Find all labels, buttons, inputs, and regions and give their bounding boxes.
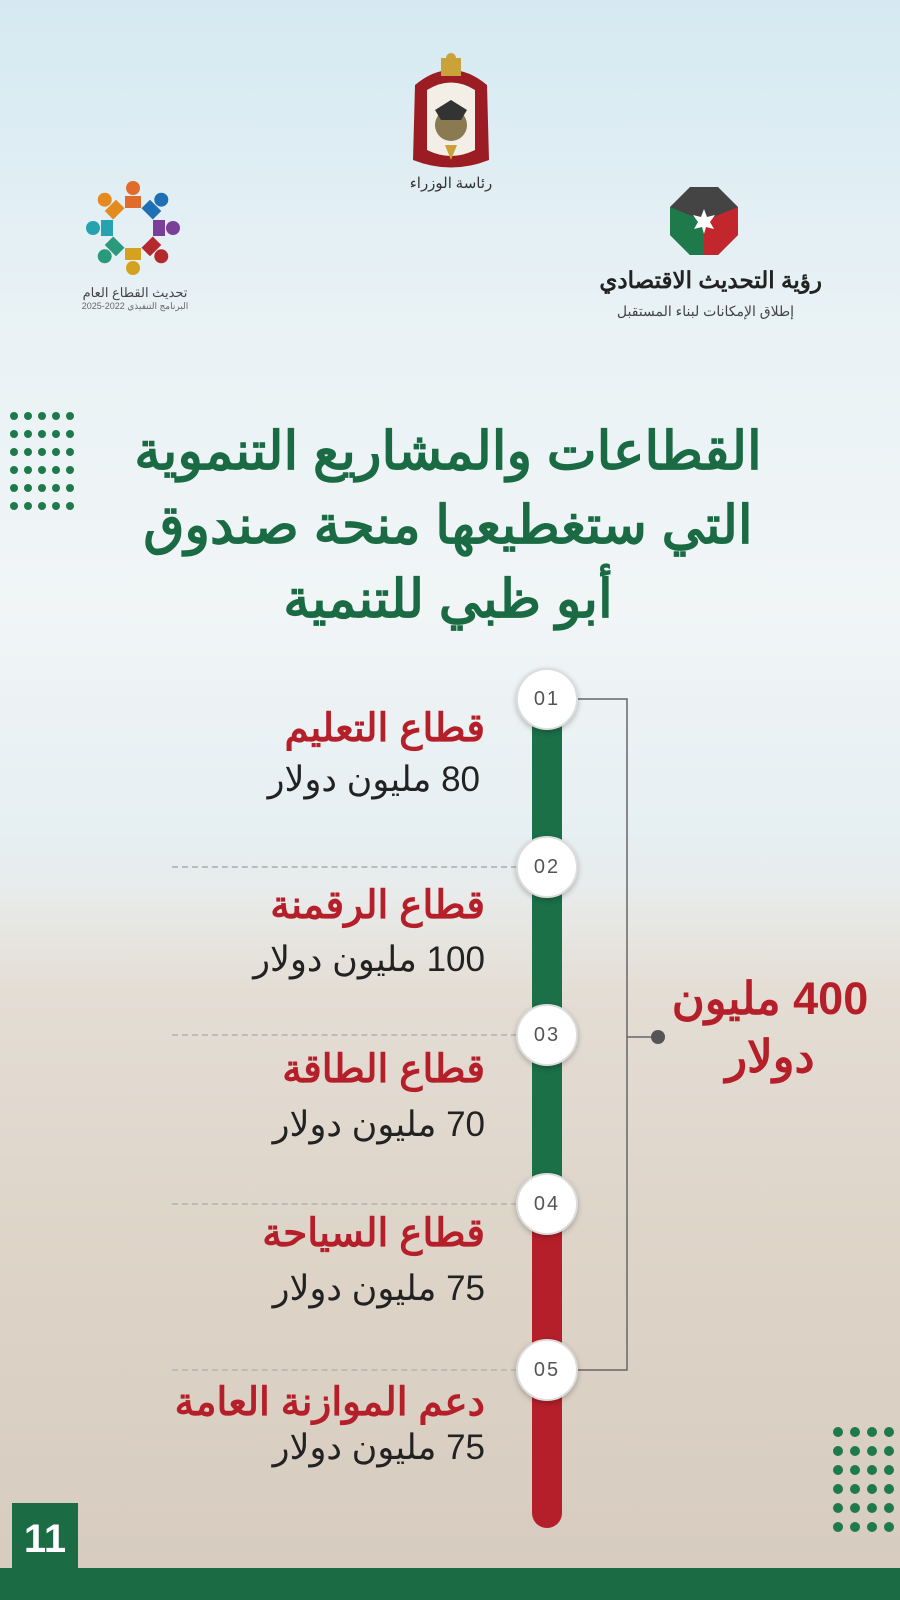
text: 04 — [534, 1193, 560, 1215]
bottom band — [0, 1568, 900, 1600]
timeline bar — [532, 699, 562, 1528]
item 2: 100 مليون دولار — [253, 940, 485, 979]
item 5: 75 مليون دولار — [273, 1428, 485, 1467]
item 3: 70 مليون دولار — [273, 1105, 485, 1144]
emblem — [410, 53, 492, 192]
title: التي ستغطيعها منحة صندوق — [143, 496, 753, 555]
dots left — [10, 412, 74, 510]
item 4 — [262, 1212, 485, 1308]
dots right — [833, 1427, 894, 1532]
item 3: قطاع الطاقة — [282, 1048, 485, 1091]
item 4: قطاع السياحة — [262, 1212, 485, 1255]
dashed connector lines — [172, 866, 517, 868]
circles: 01 — [534, 688, 560, 710]
logo left: public sector modernization: تحديث القطاع العام — [83, 285, 187, 300]
title: أبو ظبي للتنمية — [283, 570, 613, 629]
item 2 — [252, 884, 485, 980]
text: 02 — [534, 856, 560, 878]
text: 03 — [534, 1024, 560, 1046]
title: القطاعات والمشاريع التنموية — [134, 422, 762, 481]
logo right: economic modernization vision — [599, 187, 822, 320]
page number — [12, 1503, 78, 1569]
title — [134, 422, 762, 631]
logo right: economic modernization vision: رؤية التحديث الاقتصادي — [599, 267, 822, 293]
logo right: economic modernization vision: إطلاق الإمكانات لبناء المستقبل — [617, 303, 794, 319]
item 3 — [271, 1048, 485, 1144]
item 1: قطاع التعليم — [284, 707, 485, 750]
item 1: 80 مليون دولار — [268, 760, 480, 799]
item 5: دعم الموازنة العامة — [175, 1381, 485, 1424]
total callout: دولار — [725, 1031, 815, 1082]
item 4: 75 مليون دولار — [273, 1269, 485, 1308]
item 2: قطاع الرقمنة — [270, 884, 485, 927]
emblem: رئاسة الوزراء — [410, 176, 492, 192]
text: 05 — [534, 1359, 560, 1381]
logo left: public sector modernization — [82, 181, 188, 312]
total callout — [672, 973, 868, 1084]
circles — [516, 668, 578, 730]
item 1 — [266, 707, 485, 800]
total callout: 400 مليون — [672, 973, 868, 1024]
bracket to total — [578, 698, 665, 1371]
logo left: public sector modernization: البرنامج التنفيذي 2022-2025 — [82, 301, 188, 311]
page number: 11 — [24, 1517, 66, 1561]
item 5 — [175, 1381, 485, 1468]
